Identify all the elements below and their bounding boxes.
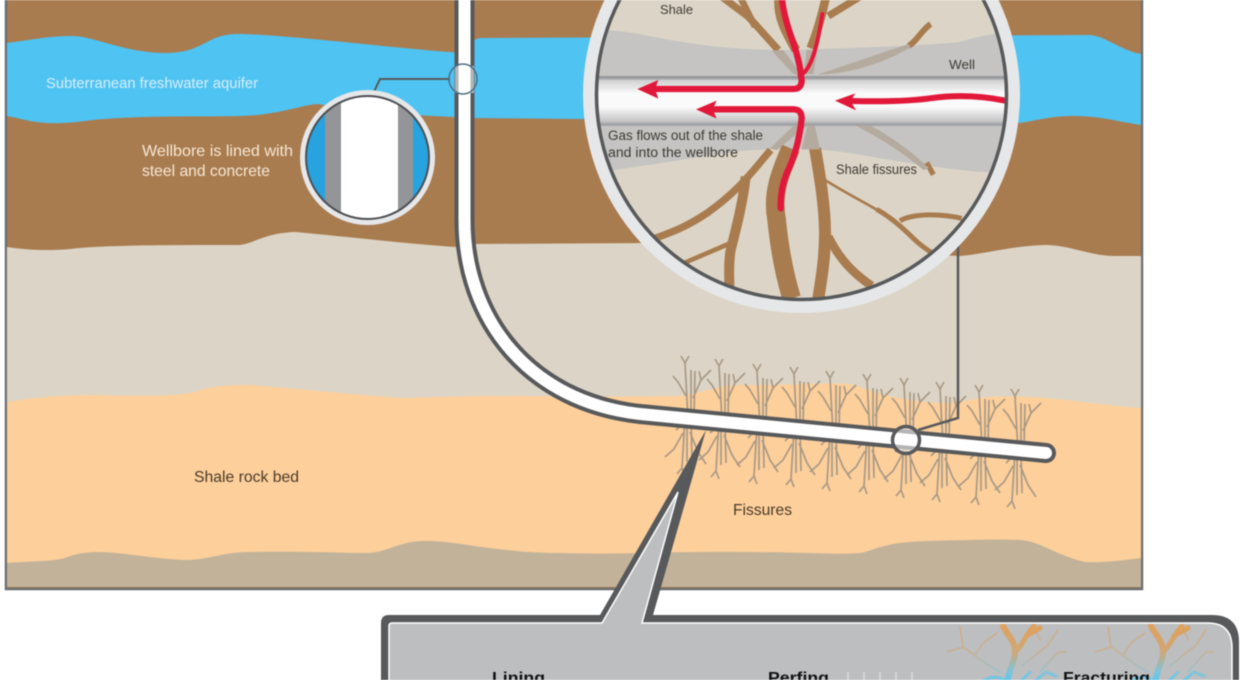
- label: aquifer: Subterranean freshwater aquifer: [46, 75, 258, 92]
- layer: freshwater aquifer: [7, 34, 1141, 125]
- upper fissures: [722, 0, 931, 50]
- callout: lining inset connector: [372, 64, 477, 96]
- small fissures along the well: [665, 356, 1041, 509]
- label: wellbore lining: steel and concrete: [142, 163, 270, 180]
- magnified well circle: [583, 0, 1020, 313]
- panel: well completion steps callout: [381, 430, 1239, 680]
- lower fissures: [655, 148, 962, 298]
- label: shale rock bed: Shale rock bed: [194, 469, 299, 486]
- layer: shale rock bed: [7, 383, 1141, 587]
- inset: wellbore lining circle: [300, 90, 435, 225]
- label: gas flow: [608, 128, 763, 160]
- label: gas flow: and into the wellbore: [608, 145, 738, 160]
- label: wellbore lining: [142, 143, 293, 180]
- callout: connector to magnified circle: [892, 220, 958, 454]
- label: shale: Shale: [660, 2, 693, 17]
- wellbore: [464, 0, 1046, 453]
- perforation marks: [848, 672, 912, 680]
- label: shale fissures: Shale fissures: [836, 162, 917, 177]
- red arrows over well: [637, 75, 1010, 127]
- layer: bottom rock: [7, 540, 1141, 587]
- fracturing fissure art: [947, 626, 1214, 680]
- gray shale band: [590, 31, 1015, 172]
- label: wellbore lining: Wellbore is lined with: [142, 143, 293, 160]
- panel: geological cross-section: [6, 0, 1142, 589]
- horizontal well section: [590, 76, 1015, 126]
- layer: beige rock: [7, 232, 1141, 587]
- label: fissures: Fissures: [733, 502, 792, 519]
- gas flow red arrows: [776, 0, 825, 212]
- label: gas flow: Gas flows out of the shale: [608, 128, 763, 143]
- label: well: Well: [949, 57, 975, 72]
- faded fissures across band: [770, 44, 929, 170]
